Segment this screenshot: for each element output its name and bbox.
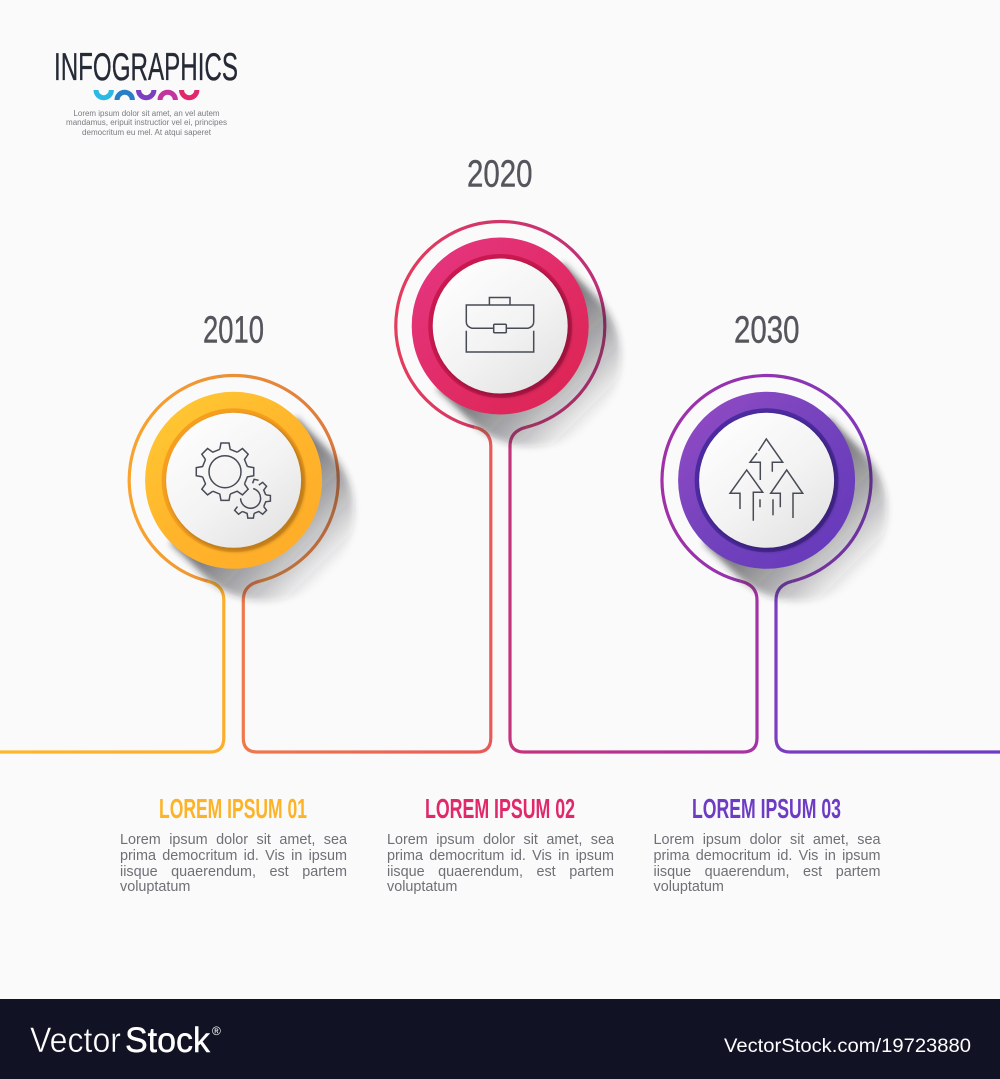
text block 01: iisque quaerendum, est partem: [120, 864, 347, 880]
logo: infographics title block: [54, 46, 238, 137]
text block 03: voluptatum: [654, 879, 724, 895]
text block 02: Lorem ipsum dolor sit amet, sea: [387, 832, 614, 848]
text block 01: Lorem ipsum dolor sit amet, sea: [120, 832, 347, 848]
logo: infographics title block: democritum eu mel. At atqui saperet: [82, 128, 212, 137]
text block 01: voluptatum: [120, 879, 190, 895]
badge: 2010 gears: [145, 392, 354, 601]
footer bar: Vector: [30, 1021, 121, 1060]
logo: infographics title block: INFOGRAPHICS: [54, 46, 238, 89]
year 2030: 2030: [734, 310, 800, 352]
footer bar: ®: [212, 1024, 221, 1038]
text block 02: prima democritum id. Vis in ipsum: [387, 848, 614, 864]
logo: infographics title block: mandamus, eripuit instructior vel ei, principes: [66, 118, 227, 127]
logo: infographics title block: Lorem ipsum dolor sit amet, an vel autem: [74, 109, 220, 118]
text block 03: Lorem ipsum dolor sit amet, sea: [654, 832, 880, 848]
badge: 2020 briefcase: [412, 238, 621, 446]
heading 02: LOREM IPSUM 02: [425, 793, 575, 824]
text block 03: prima democritum id. Vis in ipsum: [654, 848, 880, 864]
footer bar: [0, 999, 1000, 1079]
icon: briefcase: [466, 298, 534, 352]
timeline line: [0, 221, 1000, 752]
icon: arrows: [730, 439, 803, 521]
text block 02: voluptatum: [387, 879, 457, 895]
heading 01: LOREM IPSUM 01: [159, 793, 307, 824]
text block 01: prima democritum id. Vis in ipsum: [120, 848, 347, 864]
text block 02: iisque quaerendum, est partem: [387, 864, 614, 880]
text block 02: [387, 832, 614, 895]
icon: gears: [196, 443, 270, 518]
footer bar: Stock: [125, 1021, 210, 1060]
text block 03: iisque quaerendum, est partem: [654, 864, 880, 880]
year 2020: 2020: [467, 154, 532, 196]
text block 01: [120, 832, 347, 895]
badge: 2030 arrows: [678, 392, 887, 601]
year 2010: 2010: [203, 310, 264, 352]
text block 03: [654, 832, 880, 895]
footer bar: VectorStock.com/19723880: [724, 1035, 971, 1057]
heading 03: LOREM IPSUM 03: [692, 793, 841, 824]
